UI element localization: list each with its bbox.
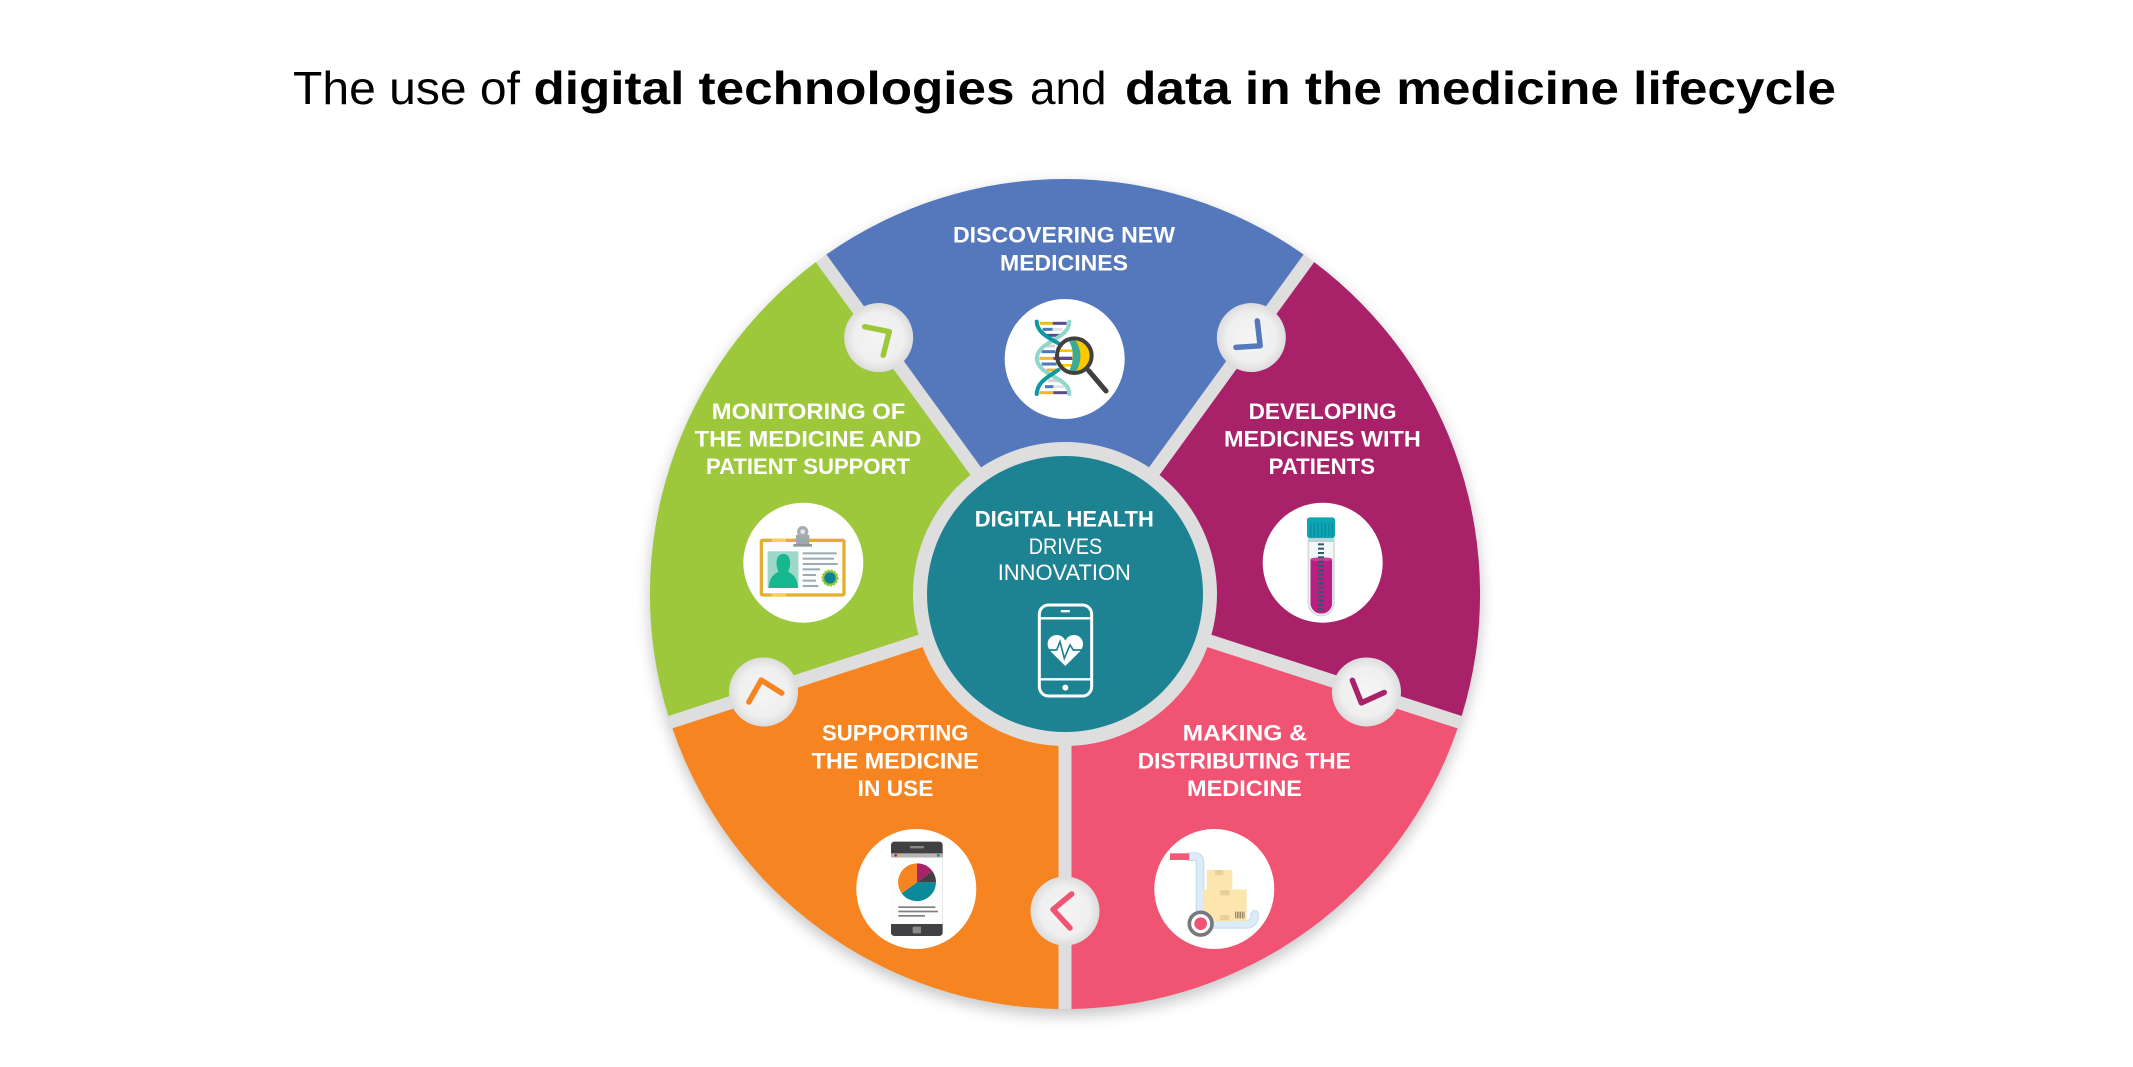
arrow node: blue (upper right) [1203,289,1300,386]
centre hub: digital health drives innovation [927,456,1203,732]
label: supporting the medicine in use [812,721,979,801]
arrow node: green (upper left) [830,289,927,386]
title: data in the medicine lifecycle [1125,62,1836,114]
label: developing medicines with patients: DEVELOPING [1249,399,1397,424]
arrow node: magenta (lower right) [1323,648,1410,735]
label: making and distributing the medicine: MAKING & [1183,721,1307,746]
arrow node: pink (bottom) [1030,876,1100,946]
label: developing medicines with patients: MEDICINES WITH [1224,427,1421,452]
label: monitoring of the medicine and patient support: THE MEDICINE AND [695,427,921,452]
label: developing medicines with patients [1224,399,1421,479]
label: discovering new medicines: DISCOVERING NEW [953,223,1175,248]
title: The use of [293,62,520,114]
label: making and distributing the medicine: DISTRIBUTING THE [1138,749,1351,774]
icon: DNA and magnifying glass [1005,299,1125,419]
icon: smartphone with heart pulse [1039,605,1092,696]
label: drives innovation [998,534,1131,585]
label: developing medicines with patients: PATIENTS [1269,454,1375,479]
label: making and distributing the medicine [1138,721,1351,801]
title: digital technologies [534,62,1014,114]
label: monitoring of the medicine and patient support [695,399,921,479]
label: monitoring of the medicine and patient support: MONITORING OF [712,399,905,424]
label: drives innovation: INNOVATION [998,560,1131,585]
label: drives innovation: DRIVES [1029,534,1102,559]
title [293,62,1836,114]
arrow node: orange (lower left) [720,648,807,735]
label: monitoring of the medicine and patient support: PATIENT SUPPORT [706,454,911,479]
segment: monitoring of the medicine and patient support [650,262,1054,716]
segment: developing medicines with patients [1160,262,1480,716]
label: supporting the medicine in use: THE MEDICINE [812,749,979,774]
title: and [1030,62,1106,114]
centre hub ring [913,442,1217,746]
lifecycle wheel [649,179,1481,1016]
segment: making and distributing the medicine [1072,603,1458,1009]
segment: supporting the medicine in use [672,603,1058,1009]
icon: phone with pie chart [856,829,976,949]
segment: discovering new medicines [826,179,1304,468]
icon: test tube [1263,503,1383,623]
icon: hand truck with boxes [1154,829,1274,949]
label: discovering new medicines: MEDICINES [1000,251,1128,276]
label: supporting the medicine in use: SUPPORTING [822,721,968,746]
label: making and distributing the medicine: MEDICINE [1187,776,1302,801]
label: digital health: DIGITAL HEALTH [975,507,1154,532]
icon: ID badge [743,503,863,623]
label: discovering new medicines [953,223,1175,276]
label: supporting the medicine in use: IN USE [858,776,933,801]
